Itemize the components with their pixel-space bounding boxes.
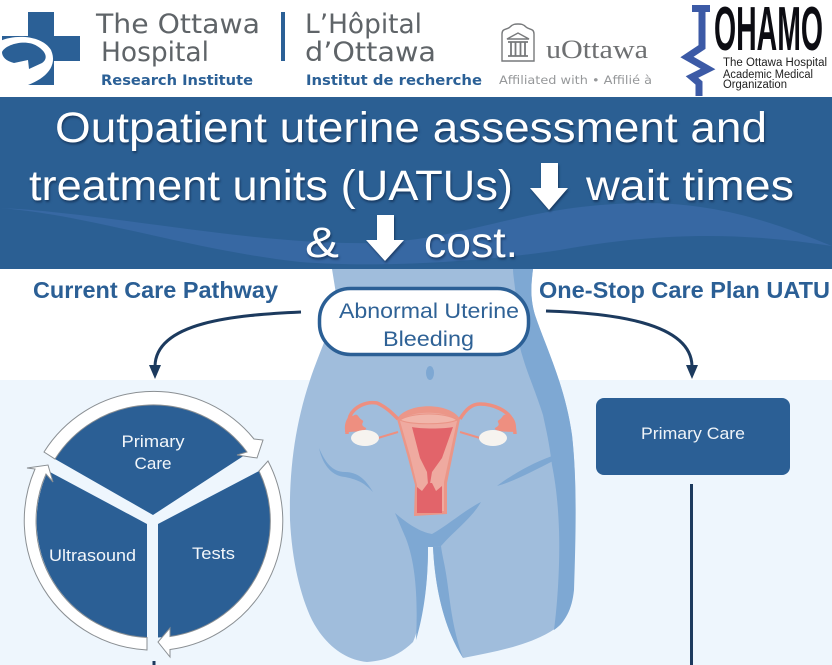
body shading	[513, 269, 576, 630]
segment: Tests	[158, 471, 270, 638]
body illustration	[290, 269, 576, 662]
segment: Primary Care	[55, 405, 248, 515]
title text	[29, 104, 794, 267]
text: Affiliated with: Affiliated with • Affilié à	[499, 73, 652, 87]
callout: Abnormal Uterine Bleeding	[320, 288, 528, 354]
text: The Ottawa Hospital: The Ottawa	[95, 9, 260, 40]
text: L'Hôpital d'Ottawa: L’Hôpital	[305, 9, 422, 40]
logo: The Ottawa Hospital: Hospital	[101, 37, 209, 68]
arrow: ring right	[158, 461, 283, 657]
segment: Ultrasound	[37, 471, 147, 638]
arrow: to one-stop care plan	[546, 311, 698, 379]
text: Institut de recherche: Institut de recherche	[306, 73, 482, 89]
title text: &	[305, 219, 339, 267]
icon: uterus	[345, 403, 516, 516]
text: organization name: The Ottawa Hospital	[723, 57, 827, 69]
text: organization name	[723, 57, 827, 91]
label: Primary Care: Primary	[122, 432, 185, 451]
title text: wait times	[585, 162, 794, 210]
callout: Abnormal Uterine Bleeding: Bleeding	[383, 328, 474, 351]
label: Primary Care: Care	[134, 454, 172, 473]
arrow: ring top	[44, 391, 263, 459]
text: organization name: Organization	[723, 79, 787, 91]
callout: Abnormal Uterine Bleeding: Abnormal Uterine	[339, 300, 519, 323]
heading: Current Care Pathway: Current Care Pathway	[33, 277, 278, 303]
text: Research Institute: Research Institute	[101, 73, 253, 89]
logo: TOHAMO	[687, 0, 827, 96]
heading: One-Stop Care Plan UATU: One-Stop Care Plan UATU	[539, 277, 830, 303]
label: Primary Care	[122, 432, 185, 473]
arrow: to current care pathway	[149, 312, 301, 379]
text: organization name: Academic Medical	[723, 69, 813, 81]
box: Primary Care: Primary Care	[641, 425, 745, 443]
crease: groin and inner thighs	[395, 502, 481, 640]
box: Primary Care	[596, 398, 790, 475]
title text: treatment units (UATUs)	[29, 162, 513, 210]
text: uOttawa: uOttawa	[546, 35, 649, 64]
logo: The Ottawa Hospital: d’Ottawa	[305, 37, 436, 68]
label: Tests: Tests	[192, 544, 235, 563]
cycle diagram: current care pathway	[24, 391, 283, 657]
title text: cost.	[424, 219, 518, 267]
icon: staff	[687, 5, 710, 96]
icon: uOttawa building	[502, 24, 534, 61]
title banner	[0, 97, 832, 269]
icon: hospital cross	[0, 12, 80, 85]
icon: down arrow	[530, 163, 568, 210]
label: Ultrasound: Ultrasound	[49, 546, 136, 565]
title text: Outpatient uterine assessment and	[55, 104, 767, 152]
logo: uOttawa	[499, 24, 652, 87]
icon: down arrow	[366, 215, 404, 261]
logo: The Ottawa Hospital	[0, 9, 482, 89]
arrow: ring left	[24, 465, 147, 650]
